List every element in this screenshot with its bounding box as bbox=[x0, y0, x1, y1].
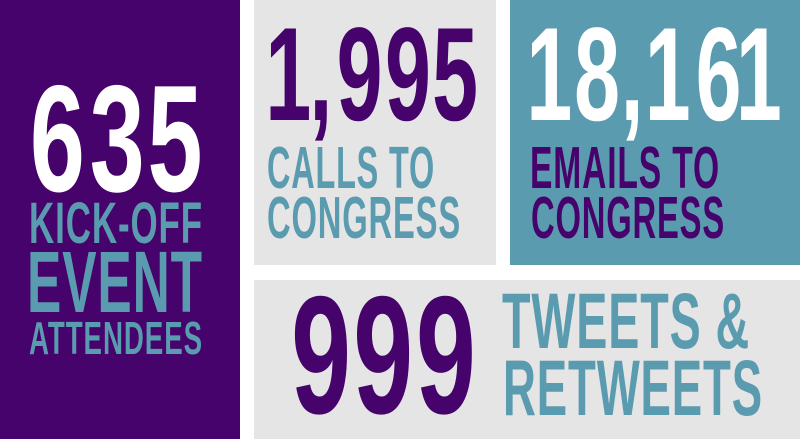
number: 1,995: 1,995 bbox=[265, 1, 478, 149]
label: calls to: CALLS TO bbox=[267, 135, 435, 201]
panel: tweets and retweets bbox=[254, 261, 800, 439]
label: event: EVENT bbox=[27, 234, 203, 331]
label: kick-off: KICK-OFF bbox=[29, 191, 203, 256]
panel: emails to congress bbox=[510, 0, 800, 265]
label: attendees: ATTENDEES bbox=[29, 312, 203, 364]
panel: calls to congress bbox=[254, 0, 496, 265]
panel: kick-off event attendees bbox=[0, 0, 240, 439]
number: 18,161: 18,161 bbox=[526, 1, 782, 149]
number: 635: 635 bbox=[30, 55, 203, 224]
label: congress: CONGRESS bbox=[267, 185, 461, 251]
